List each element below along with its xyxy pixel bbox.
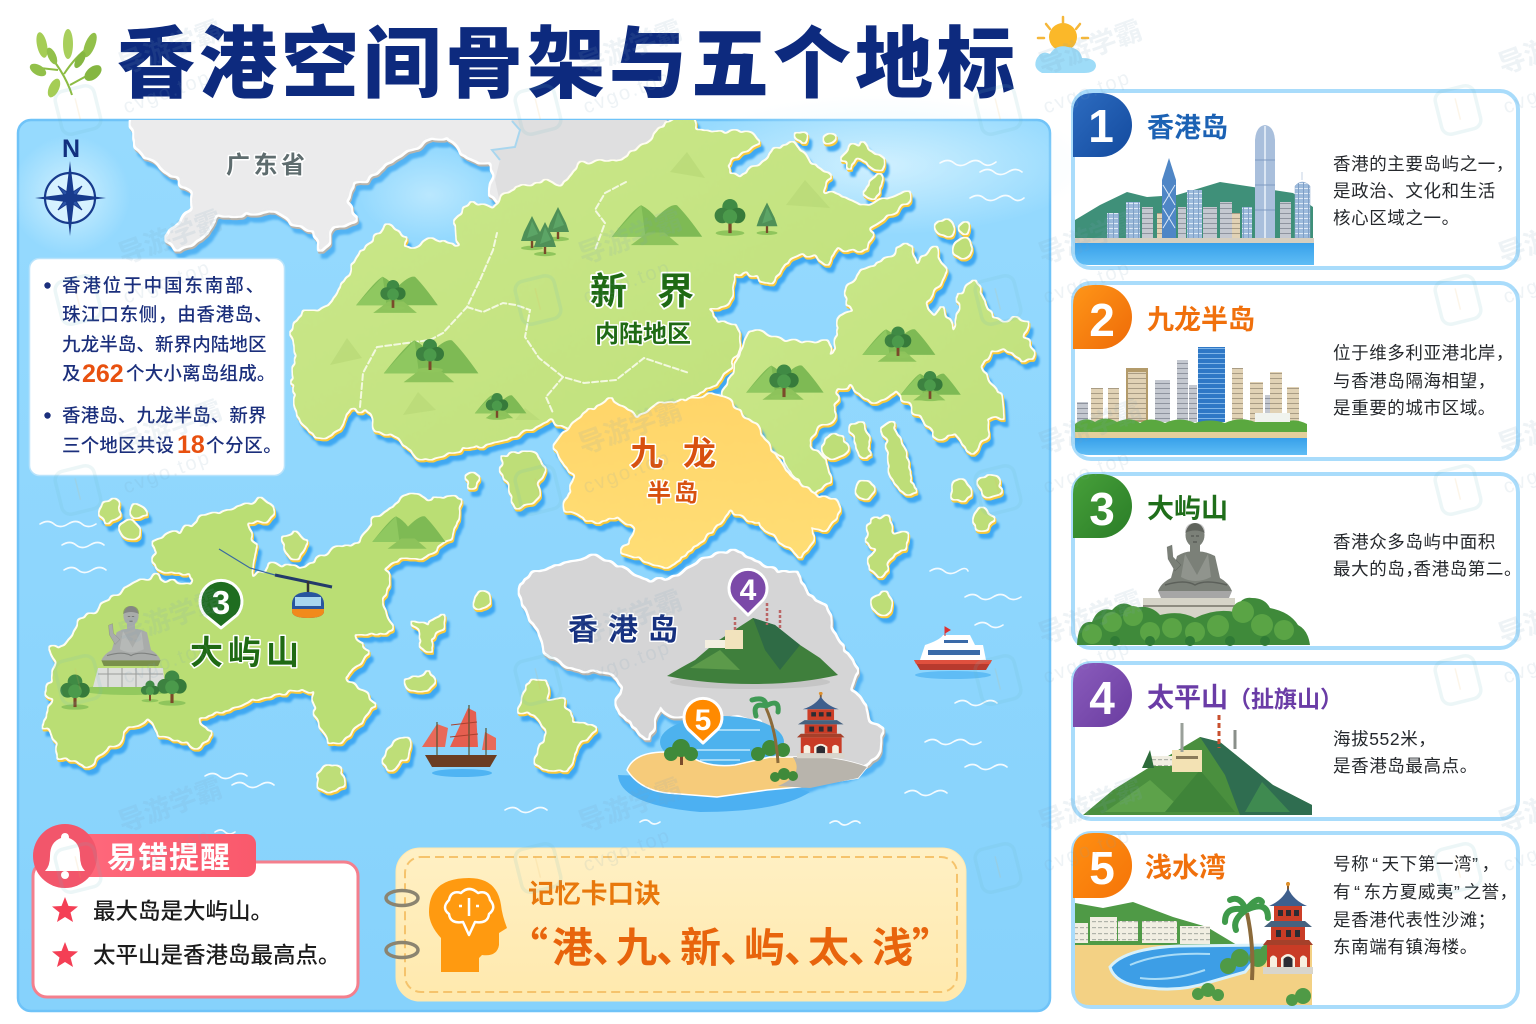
badge 3: 3 — [1089, 483, 1115, 535]
text: Victoria Peak — [1333, 729, 1478, 776]
text: Repulse Bay: 有“东方夏威夷”之誉， — [1333, 882, 1518, 902]
text: Kowloon — [1333, 343, 1514, 418]
land: Sai Kung east peninsula — [724, 242, 1035, 493]
panel: map — [10, 95, 1090, 1011]
heading: Victoria Peak: 太平山（扯旗山） — [1147, 683, 1343, 713]
panel: memory card — [386, 848, 966, 1001]
text: Kowloon: 与香港岛隔海相望， — [1333, 371, 1496, 391]
mnemonic: “港、九、新、屿、太、浅” — [507, 914, 953, 974]
text: Lantau: 香港众多岛屿中面积 — [1333, 532, 1496, 552]
mistakes header: 易错提醒 — [107, 842, 231, 875]
icon: compass — [35, 135, 106, 236]
card 1: Hong Kong Island — [1073, 91, 1518, 268]
label: New Territories: 界 — [657, 271, 694, 312]
icon: compass: N — [62, 135, 80, 163]
illustration: Kowloon skyline — [1075, 347, 1307, 455]
icon: leaf branch — [28, 29, 105, 99]
illustration: Repulse Bay — [1075, 882, 1313, 1006]
bullet 1 text — [44, 275, 276, 388]
icon: Victoria Peak on map — [667, 603, 838, 689]
text: Repulse Bay: 是香港代表性沙滩； — [1333, 910, 1496, 930]
text: Kowloon: 是重要的城市区域。 — [1333, 398, 1496, 418]
badge 2 — [1073, 285, 1132, 349]
bullet 2 text: 香港岛、九龙半岛、新界 — [62, 405, 267, 426]
label: New Territories: 新 — [590, 271, 627, 312]
text: Repulse Bay: 号称“天下第一湾”， — [1333, 854, 1500, 874]
binder rings — [386, 890, 418, 958]
label: New Territories — [590, 271, 694, 348]
bullet 1 text: 香港位于中国东南部、 — [62, 275, 266, 296]
panel: common mistakes — [33, 824, 358, 997]
text: Hong Kong Island: 核心区域之一。 — [1333, 208, 1460, 228]
text: Hong Kong Island — [1333, 154, 1514, 228]
text: Victoria Peak: 是香港岛最高点。 — [1333, 756, 1478, 776]
bullet 1 text: 珠江口东侧，由香港岛、 — [62, 304, 273, 325]
pin 5 — [684, 698, 722, 743]
land: Hong Kong Island — [520, 550, 882, 783]
land: Kowloon peninsula — [553, 395, 843, 568]
card 5: Repulse Bay — [1073, 833, 1518, 1007]
pin 3: 3 — [212, 584, 230, 621]
bullet 2 text: 18 — [177, 431, 205, 459]
heading: Lantau: 大屿山 — [1147, 494, 1228, 524]
badge 4 — [1073, 663, 1132, 727]
mistake 2: 太平山是香港岛最高点。 — [93, 943, 341, 968]
sea waves — [40, 160, 1024, 834]
icon: Repulse Bay beach on map — [618, 692, 867, 812]
pin 4: 4 — [740, 574, 757, 607]
land: Lantau island — [43, 493, 460, 767]
trees: Lantau — [60, 670, 187, 710]
illustration: Big Buddha — [1077, 523, 1310, 646]
badge 5 — [1073, 833, 1132, 898]
label: New Territories: 内陆地区 — [595, 321, 691, 348]
land: New Territories — [290, 118, 910, 460]
faint terrain — [330, 152, 830, 420]
label: Guangdong: 广东省 — [226, 152, 308, 179]
badge 3 — [1073, 474, 1132, 538]
bullet 1 text: 九龙半岛、新界内陆地区 — [62, 334, 267, 355]
illustration: Victoria Peak — [1083, 715, 1312, 815]
heading: Repulse Bay: 浅水湾 — [1145, 852, 1226, 883]
bullet 2 text: 三个地区共设 — [62, 435, 174, 456]
bullet 1 text: 262 — [82, 360, 124, 388]
text: Repulse Bay: 东南端有镇海楼。 — [1333, 937, 1478, 957]
mistake 1: 最大岛是大屿山。 — [93, 899, 273, 924]
label: Lantau: 大屿山 — [190, 634, 304, 671]
text: Kowloon: 位于维多利亚港北岸， — [1333, 343, 1514, 363]
icon: Lantau hills — [372, 516, 445, 549]
card 2: Kowloon — [1073, 283, 1518, 459]
land: Guangdong province — [128, 104, 668, 250]
memory card heading: 记忆卡口诀 — [528, 879, 660, 909]
title: 香港空间骨架与五个地标 — [117, 20, 1019, 108]
icon: Tian Tan Buddha on map — [80, 606, 180, 695]
heading: Kowloon: 九龙半岛 — [1147, 305, 1255, 335]
badge 1 — [1073, 93, 1132, 157]
icon: junk boat — [422, 705, 497, 777]
card 3: Lantau — [1073, 474, 1522, 648]
icon: ferry — [914, 627, 992, 679]
label: Hong Kong Island: 香港岛 — [568, 614, 688, 647]
card 4: Victoria Peak — [1073, 663, 1518, 819]
text: Victoria Peak: 海拔552米， — [1333, 729, 1436, 749]
icon: cable car — [219, 549, 332, 618]
text: Hong Kong Island: 是政治、文化和生活 — [1333, 181, 1496, 201]
pin 5: 5 — [695, 704, 711, 737]
text: Lantau — [1333, 532, 1522, 579]
text: Hong Kong Island: 香港的主要岛屿之一， — [1333, 154, 1514, 174]
trees and mountains: New Territories — [356, 199, 961, 420]
text: Lantau: 最大的岛，香港岛第二。 — [1333, 559, 1522, 579]
badge 1: 1 — [1088, 100, 1114, 152]
illustration: Hong Kong skyline — [1075, 125, 1314, 265]
bullet 2 text — [44, 405, 282, 459]
small islands — [100, 133, 1000, 792]
pin 4 — [729, 569, 767, 615]
label: Kowloon: 半岛 — [647, 480, 701, 507]
map sea background — [18, 120, 1050, 1011]
heading: Hong Kong Island: 香港岛 — [1147, 113, 1228, 143]
bullet 1 text: 个大小离岛组成。 — [126, 363, 276, 384]
bullet 2 text: 个分区。 — [206, 435, 282, 456]
icon: head with brain — [429, 878, 507, 972]
badge 4: 4 — [1089, 672, 1115, 724]
sea highlights — [10, 95, 1090, 255]
badge 2: 2 — [1089, 294, 1115, 346]
pin 3 — [200, 580, 242, 628]
label: Kowloon: 九 — [630, 435, 663, 472]
panel: overview text — [30, 258, 284, 476]
icon: sun and cloud — [1035, 17, 1096, 73]
label: Kowloon: 龙 — [683, 435, 716, 472]
text: Repulse Bay — [1333, 854, 1518, 957]
bullet 1 text: 及 — [62, 363, 81, 384]
district boundaries — [360, 182, 689, 413]
badge 5: 5 — [1089, 842, 1115, 894]
mistakes header — [33, 824, 256, 888]
label: Kowloon — [630, 435, 716, 507]
